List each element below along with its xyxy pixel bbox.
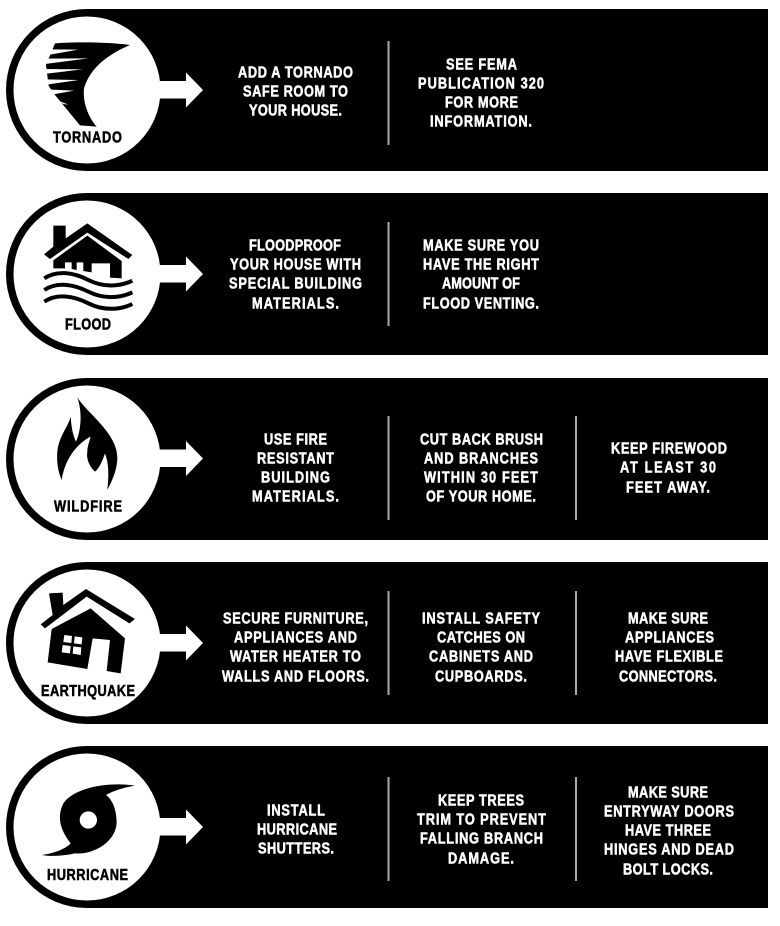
text: earthquake action 1: WATER HEATER TO [230, 648, 361, 666]
text: wildfire action 1: RESISTANT [257, 450, 334, 468]
text: flood action 2 [423, 237, 539, 313]
text: hurricane action 2 [417, 792, 546, 868]
text: hurricane action 3: MAKE SURE [628, 784, 708, 802]
label: earthquake: EARTHQUAKE [41, 683, 135, 700]
text: flood action 1: YOUR HOUSE WITH [230, 256, 361, 274]
text: earthquake action 3: HAVE FLEXIBLE [615, 648, 723, 666]
text: flood action 1: FLOODPROOF [249, 237, 341, 255]
text: wildfire action 2: OF YOUR HOME. [426, 488, 536, 506]
text: wildfire action 2: AND BRANCHES [424, 450, 538, 468]
panel: earthquake [6, 562, 768, 724]
text: earthquake action 2: CABINETS AND [429, 648, 533, 666]
text: earthquake action 3: MAKE SURE [628, 610, 708, 628]
icon: flame [57, 397, 117, 490]
icon: tornado [43, 42, 130, 127]
text: earthquake action 3: APPLIANCES [625, 629, 714, 647]
label: wildfire: WILDFIRE [54, 498, 122, 516]
text: tornado action 1 [238, 64, 353, 120]
text: tornado action 2: SEE FEMA [446, 56, 517, 74]
text: hurricane action 1 [257, 802, 337, 858]
icon: hurricane [42, 784, 135, 856]
text: hurricane action 2: TRIM TO PREVENT [417, 811, 546, 829]
text: wildfire action 2 [420, 431, 543, 506]
text: hurricane action 2: KEEP TREES [438, 792, 524, 810]
text: earthquake action 1: SECURE FURNITURE, [223, 610, 368, 628]
text: wildfire action 3 [611, 440, 727, 497]
label: tornado: TORNADO [53, 129, 122, 147]
text: earthquake action 2: CATCHES ON [437, 629, 525, 647]
text: flood action 1: MATERIALS. [252, 295, 339, 313]
panel: tornado [6, 9, 768, 171]
text: wildfire action 3: KEEP FIREWOOD [611, 440, 727, 458]
label: hurricane: HURRICANE [47, 867, 128, 884]
text: earthquake action 2 [422, 610, 540, 686]
text: tornado action 2 [418, 56, 544, 131]
text: hurricane action 1: HURRICANE [257, 821, 337, 839]
text: flood action 1 [229, 237, 362, 313]
text: hurricane action 3 [604, 784, 734, 879]
label: flood: FLOOD [65, 316, 111, 334]
text: wildfire action 3: FEET AWAY. [626, 479, 710, 497]
text: earthquake action 1: APPLIANCES AND [234, 629, 357, 647]
text: flood action 2: AMOUNT OF [442, 275, 520, 293]
text: hurricane action 3: BOLT LOCKS. [623, 861, 713, 879]
text: hurricane action 3: HINGES AND DEAD [604, 841, 734, 859]
panel: wildfire [6, 378, 768, 540]
text: tornado action 2: INFORMATION. [430, 113, 532, 131]
text: earthquake action 2: CUPBOARDS. [435, 668, 527, 686]
icon: tilted house [41, 589, 135, 673]
text: wildfire action 1: MATERIALS. [252, 488, 339, 506]
panel: flood [6, 193, 768, 355]
text: hurricane action 2: FALLING BRANCH [420, 830, 543, 848]
text: earthquake action 2: INSTALL SAFETY [422, 610, 540, 628]
text: tornado action 1: ADD A TORNADO [238, 64, 353, 82]
text: flood action 2: MAKE SURE YOU [423, 237, 539, 255]
text: wildfire action 2: CUT BACK BRUSH [420, 431, 543, 449]
text: flood action 2: FLOOD VENTING. [423, 295, 539, 313]
text: earthquake action 3: CONNECTORS. [619, 668, 717, 686]
text: hurricane action 3: ENTRYWAY DOORS [604, 803, 734, 821]
text: wildfire action 1 [252, 431, 339, 506]
text: earthquake action 3 [615, 610, 723, 686]
text: flood action 2: HAVE THE RIGHT [423, 256, 539, 274]
text: wildfire action 3: AT LEAST 30 [620, 459, 716, 477]
text: wildfire action 1: BUILDING [261, 469, 330, 487]
text: earthquake action 1 [222, 610, 369, 686]
text: hurricane action 1: INSTALL [267, 802, 325, 820]
text: hurricane action 3: HAVE THREE [625, 822, 711, 840]
text: tornado action 2: PUBLICATION 320 [418, 75, 544, 93]
text: flood action 1: SPECIAL BUILDING [229, 275, 362, 293]
text: tornado action 1: SAFE ROOM TO [243, 83, 348, 101]
text: hurricane action 1: SHUTTERS. [258, 840, 334, 858]
text: hurricane action 2: DAMAGE. [448, 850, 514, 868]
icon: flood house [44, 223, 132, 309]
text: tornado action 2: FOR MORE [445, 94, 518, 112]
panel: hurricane [6, 746, 768, 908]
text: wildfire action 1: USE FIRE [264, 431, 327, 449]
text: tornado action 1: YOUR HOUSE. [249, 102, 342, 120]
text: wildfire action 2: WITHIN 30 FEET [424, 469, 538, 487]
text: earthquake action 1: WALLS AND FLOORS. [222, 668, 369, 686]
